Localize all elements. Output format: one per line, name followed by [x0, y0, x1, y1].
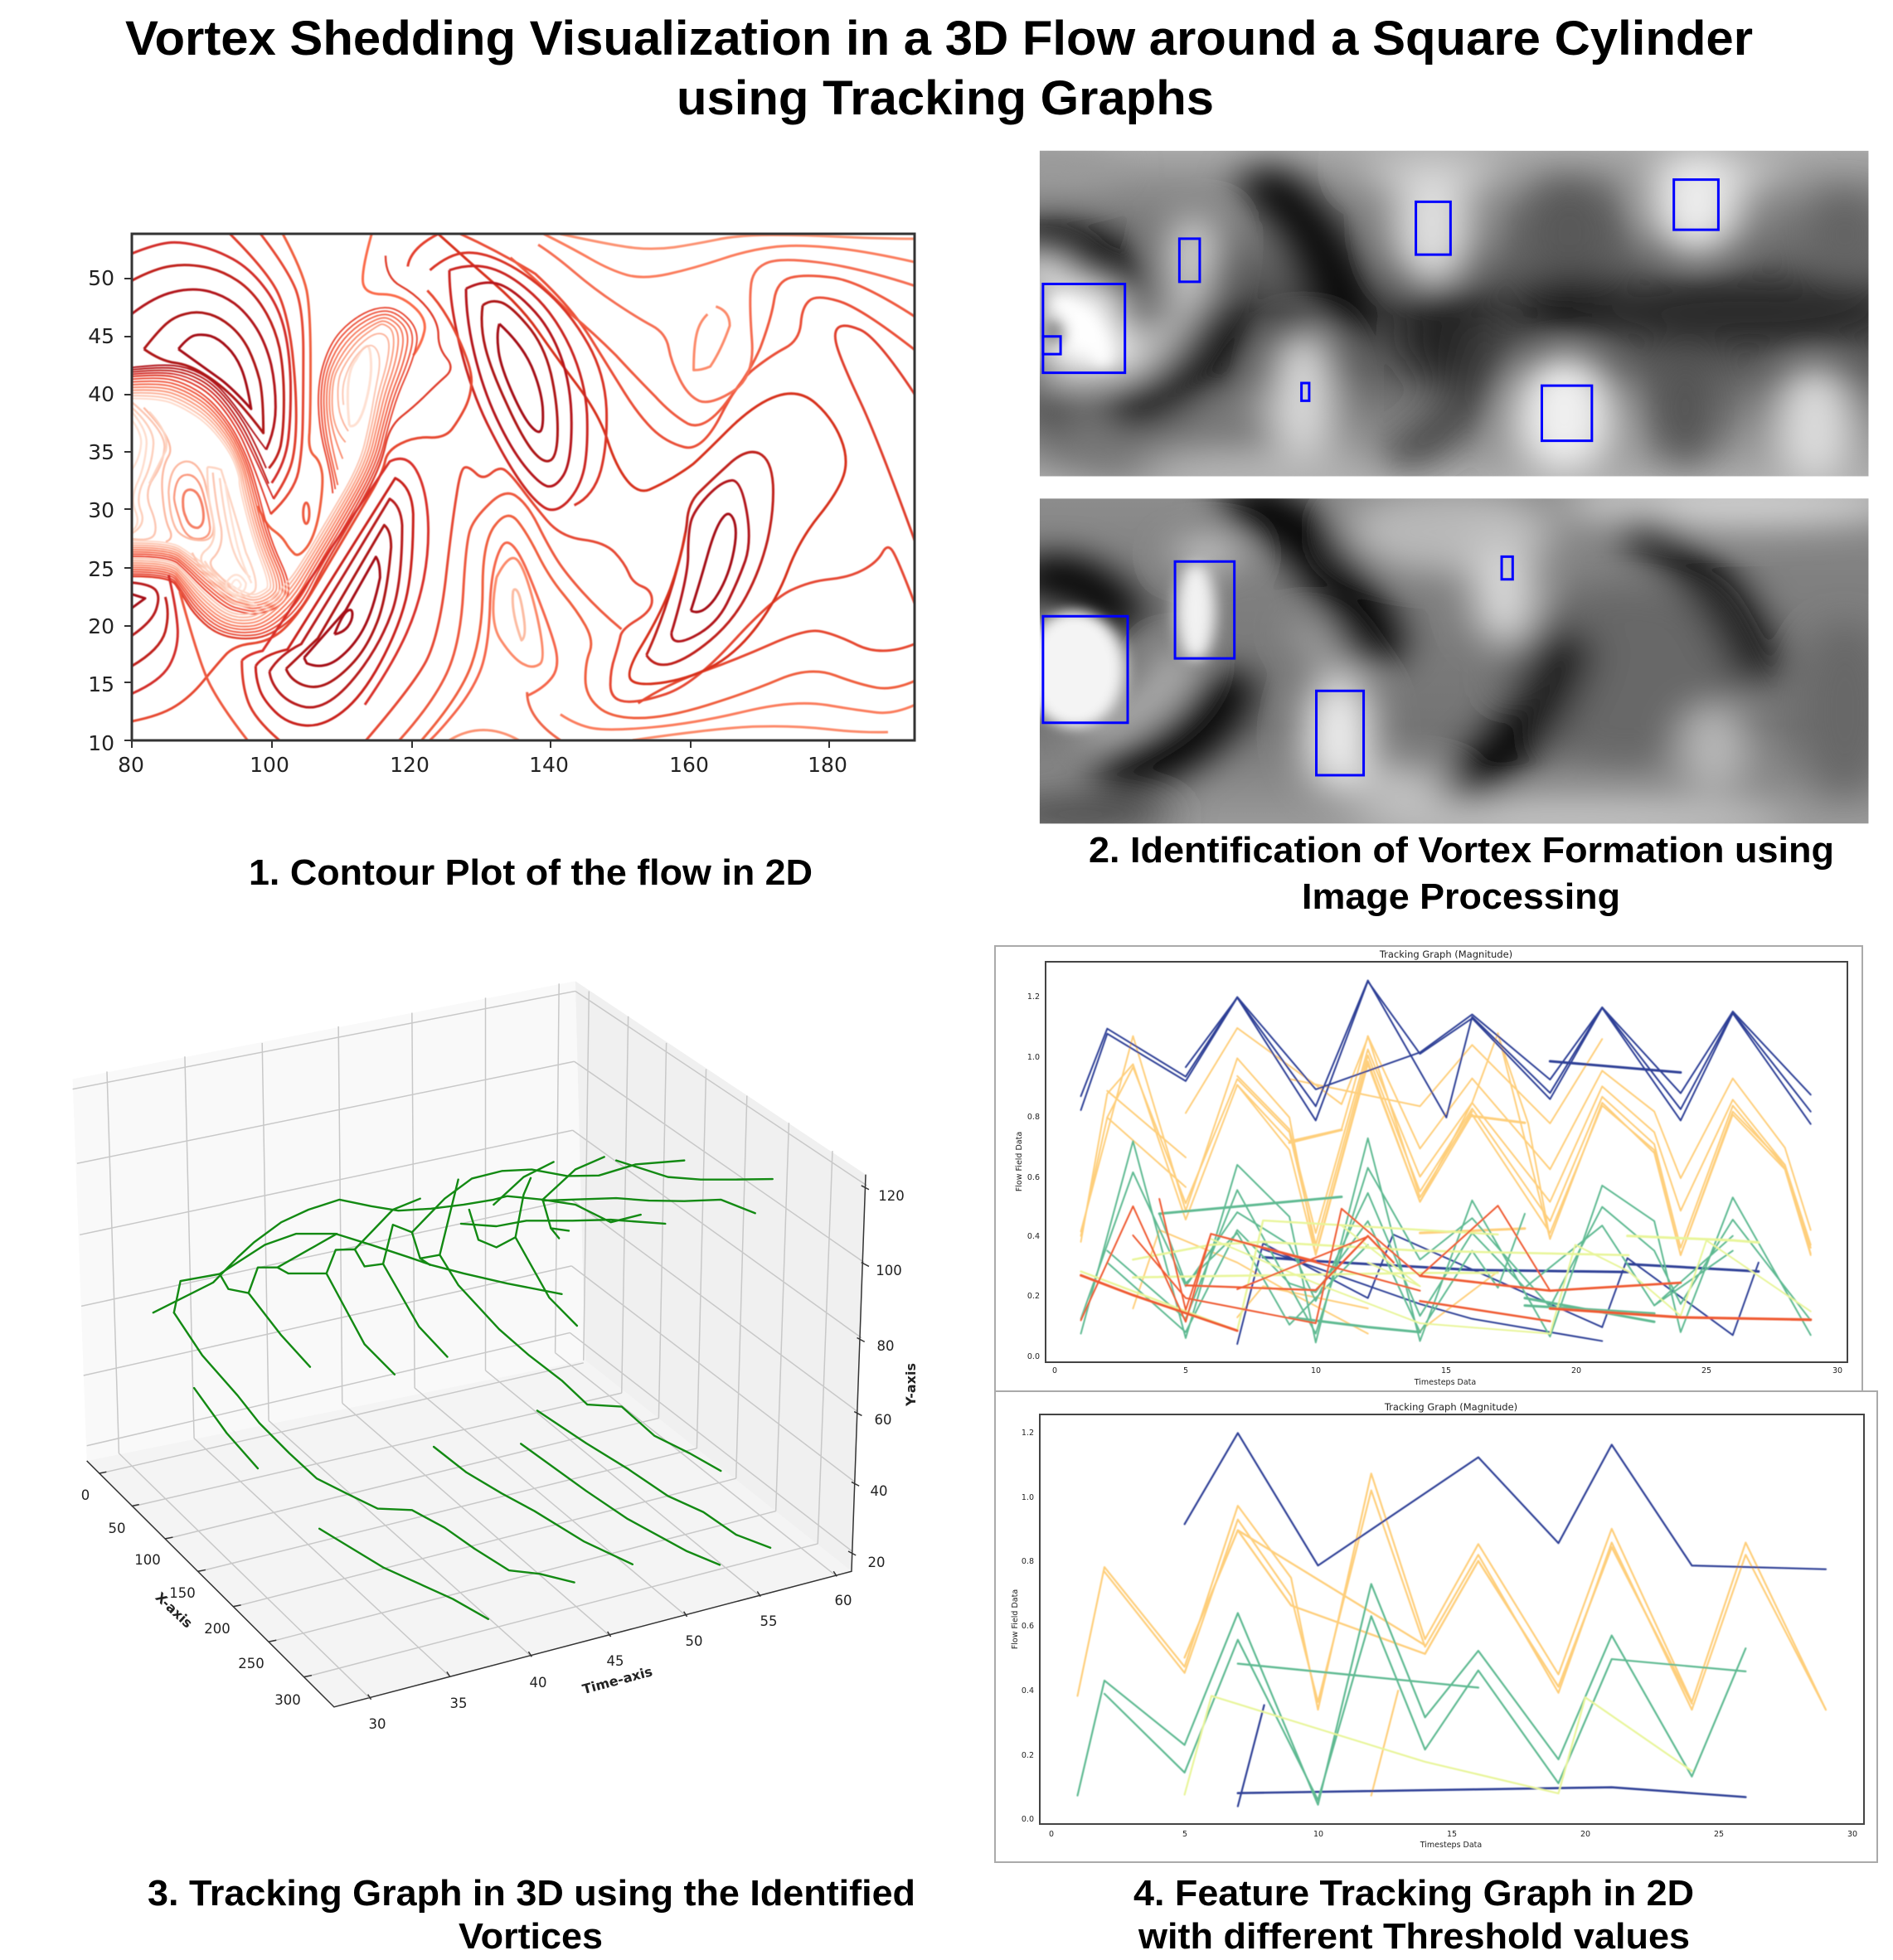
x tick labels: 80	[118, 753, 144, 777]
x tick labels: 120	[390, 753, 430, 777]
left core rings	[132, 378, 289, 614]
axis labels: Time-axis	[580, 1663, 654, 1697]
y tick labels: 30	[88, 498, 114, 522]
tick labels: 0.0	[1027, 1352, 1040, 1361]
tick labels	[1022, 1429, 1857, 1839]
frame: bottom vorticity image	[1040, 498, 1869, 824]
tick labels: 1.2	[1027, 992, 1040, 1002]
caption 2	[1089, 830, 1834, 917]
tick labels	[1027, 992, 1842, 1375]
tick labels: 0	[1052, 1366, 1057, 1375]
y axis tick labels: 20	[867, 1555, 886, 1570]
lower lobe	[334, 610, 352, 634]
time axis tick labels: 45	[607, 1653, 624, 1669]
tick labels: 0.6	[1022, 1622, 1034, 1631]
plot frame	[132, 234, 915, 740]
y tick labels: 20	[88, 614, 114, 638]
lines	[1078, 1433, 1826, 1807]
x axis tick labels: 150	[169, 1585, 196, 1601]
tick labels: 0.6	[1027, 1173, 1040, 1182]
y tick labels: 15	[88, 672, 114, 696]
diagonal band lines	[132, 290, 472, 721]
upper band to tips	[132, 366, 266, 449]
title: using Tracking Graphs	[677, 71, 1214, 125]
time axis tick labels: 60	[834, 1593, 852, 1608]
tick labels: 0	[1049, 1830, 1054, 1839]
axis titles: Timesteps Data	[1420, 1841, 1482, 1850]
contour lines	[132, 234, 915, 740]
y tick labels: 35	[88, 440, 114, 464]
chart: tracking graph high threshold	[995, 1391, 1877, 1862]
tick labels: 1.2	[1022, 1429, 1034, 1438]
y axis tick labels	[867, 1188, 905, 1570]
panel 4: 2D tracking graphs	[995, 946, 1877, 1862]
tick labels: 20	[1571, 1366, 1581, 1375]
tick labels: 1.0	[1027, 1053, 1040, 1062]
tick labels: 20	[1580, 1830, 1590, 1839]
axis titles: Flow Field Data	[1011, 1589, 1020, 1649]
axis labels: Y-axis	[903, 1363, 919, 1407]
axis ticks	[124, 279, 829, 748]
y tick labels: 50	[88, 266, 114, 290]
x axis tick labels	[81, 1487, 301, 1708]
x tick labels: 100	[250, 753, 289, 777]
axis labels: X-axis	[153, 1589, 196, 1631]
title	[125, 12, 1753, 125]
time axis tick labels: 35	[449, 1696, 468, 1711]
time axis tick labels	[368, 1593, 852, 1732]
x axis tick labels: 50	[108, 1521, 126, 1536]
tick labels: 0.8	[1027, 1113, 1040, 1122]
y tick labels: 45	[88, 324, 114, 348]
tick labels: 25	[1701, 1366, 1711, 1375]
y axis tick labels: 80	[877, 1338, 894, 1354]
y tick labels: 40	[88, 382, 114, 406]
tick labels: 1.0	[1022, 1493, 1034, 1502]
axis titles	[1015, 1132, 1476, 1387]
tick labels: 0.4	[1027, 1232, 1040, 1241]
x axis tick labels: 100	[134, 1552, 161, 1568]
panel 1: contour plot	[88, 234, 915, 777]
caption 4: with different Threshold values	[1138, 1916, 1690, 1957]
chart title: Tracking Graph (Magnitude)	[1379, 948, 1512, 960]
x tick labels: 180	[808, 753, 847, 777]
tick labels: 0.2	[1027, 1292, 1040, 1301]
y tick labels: 25	[88, 557, 114, 581]
caption 1: 1. Contour Plot of the flow in 2D	[249, 852, 813, 893]
caption 3: 3. Tracking Graph in 3D using the Identified	[148, 1873, 915, 1914]
lines	[1081, 980, 1811, 1344]
panel 2: image processing frames	[1040, 151, 1869, 824]
tick labels: 10	[1311, 1366, 1321, 1375]
tick labels: 0.0	[1022, 1815, 1034, 1824]
time axis tick labels: 40	[529, 1675, 547, 1691]
lower left lobes	[132, 594, 145, 608]
tick labels: 25	[1714, 1830, 1724, 1839]
time axis tick labels: 55	[760, 1613, 778, 1629]
core interior rings	[183, 490, 203, 528]
title: Vortex Shedding Visualization in a 3D Flow around a Square Cylinder	[125, 12, 1753, 65]
y axis tick labels: 40	[871, 1483, 887, 1499]
tick labels: 0.2	[1022, 1751, 1034, 1760]
y tick labels	[88, 266, 114, 755]
tick labels: 5	[1183, 1366, 1188, 1375]
y axis tick labels: 120	[878, 1188, 905, 1204]
tick labels: 30	[1847, 1830, 1857, 1839]
chart title: Tracking Graph (Magnitude)	[1384, 1401, 1517, 1413]
caption 2: Image Processing	[1302, 876, 1620, 917]
x axis tick labels: 250	[238, 1656, 265, 1671]
frame: top vorticity image	[1040, 151, 1869, 476]
tick labels: 10	[1313, 1830, 1323, 1839]
tick labels: 15	[1441, 1366, 1451, 1375]
caption 4	[1133, 1873, 1694, 1957]
axis titles	[1011, 1589, 1482, 1850]
caption 2: 2. Identification of Vortex Formation using	[1089, 830, 1834, 871]
caption 3: Vortices	[459, 1916, 603, 1957]
x axis tick labels: 0	[81, 1487, 90, 1503]
caption 4: 4. Feature Tracking Graph in 2D	[1133, 1873, 1694, 1914]
tick labels: 15	[1447, 1830, 1457, 1839]
3D axes panes and grid	[73, 981, 869, 1707]
axis titles: Flow Field Data	[1015, 1132, 1024, 1191]
tick labels: 5	[1182, 1830, 1187, 1839]
tick labels: 0.8	[1022, 1557, 1034, 1566]
y tick labels: 10	[88, 731, 114, 755]
x axis tick labels: 300	[274, 1692, 301, 1708]
time axis tick labels: 50	[685, 1633, 703, 1649]
axis titles: Timesteps Data	[1414, 1378, 1476, 1387]
x axis tick labels: 200	[204, 1621, 231, 1637]
x tick labels: 160	[669, 753, 709, 777]
tick labels: 0.4	[1022, 1686, 1034, 1696]
green tracks	[153, 1157, 773, 1619]
x tick labels	[118, 753, 847, 777]
time axis tick labels: 30	[368, 1716, 386, 1732]
caption 3	[148, 1873, 915, 1957]
y axis tick labels: 60	[874, 1412, 892, 1428]
y axis tick labels: 100	[876, 1263, 902, 1278]
x tick labels: 140	[529, 753, 569, 777]
chart: tracking graph all thresholds	[995, 946, 1862, 1391]
detection boxes	[1043, 180, 1718, 775]
axis labels	[153, 1363, 919, 1697]
panel 3: 3D tracking graph	[73, 981, 919, 1732]
tick labels: 30	[1832, 1366, 1842, 1375]
